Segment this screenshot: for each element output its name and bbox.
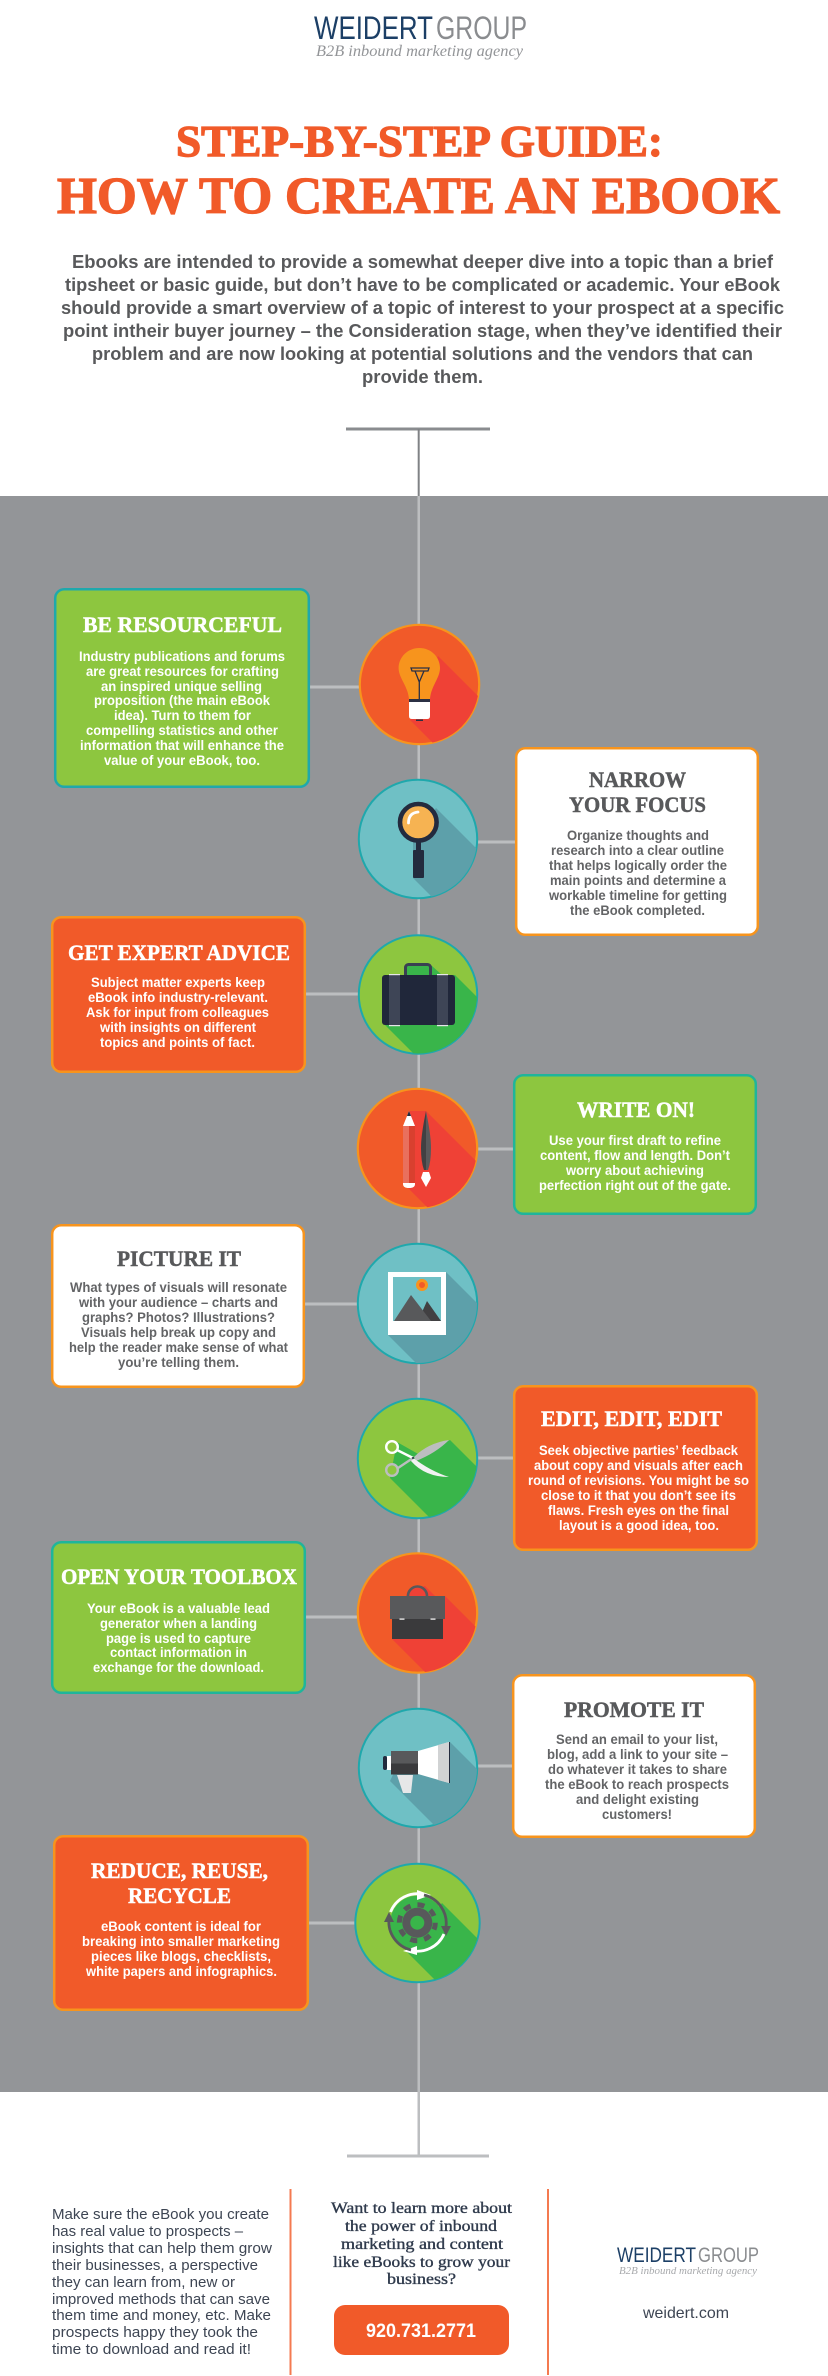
body text: be resourceful: are great resources for crafting [86,664,279,679]
body text: write on: content, flow and length. Don’t [540,1148,730,1163]
footer: logo: B2B inbound marketing agency [619,2265,757,2277]
body text: edit edit edit: about copy and visuals after each [534,1458,743,1473]
body text: picture it: with your audience – charts and [78,1295,278,1310]
heading: be resourceful: BE RESOURCEFUL [83,612,282,637]
body text: reduce reuse recycle: pieces like blogs, checklists, [91,1949,271,1964]
footer: left paragraph: them time and money, etc. Make [52,2307,271,2324]
body text: edit edit edit [528,1443,749,1533]
panel: narrow your focus [516,748,758,935]
footer: left paragraph: Make sure the eBook you create [52,2206,269,2223]
body text: be resourceful: value of your eBook, too. [104,753,260,768]
body text: narrow your focus [548,828,727,918]
body text: open your toolbox: exchange for the download. [93,1660,264,1675]
icon: recycle gear [354,1862,481,1984]
body text: be resourceful: Industry publications and forums [79,649,285,664]
footer: left paragraph: their businesses, a perspective [52,2257,258,2274]
footer: left paragraph: improved methods that can save [52,2291,270,2308]
body text: edit edit edit: Seek objective parties’ feedback [539,1443,738,1458]
body text: narrow your focus: main points and determine a [550,873,726,888]
intro paragraph: Ebooks are intended to provide a somewhat deeper dive into a topic than a brief [72,251,774,272]
body text: promote it: the eBook to reach prospects [545,1777,729,1792]
footer: logo: WEIDERT [617,2244,696,2267]
body text: be resourceful: compelling statistics and other [86,723,279,738]
panel: open your toolbox [52,1542,305,1693]
intro paragraph: tipsheet or basic guide, but don’t have to be complicated or academic. Your eBook [65,274,781,295]
body text: edit edit edit: close to it that you don’t see its [541,1488,736,1503]
body text: be resourceful: proposition (the main eBook [94,693,270,708]
title: HOW TO CREATE AN EBOOK [57,168,781,225]
heading: promote it: PROMOTE IT [564,1697,704,1722]
footer: call to action text: the power of inbound [345,2218,497,2235]
body text: picture it: What types of visuals will resonate [70,1280,287,1295]
footer: logo [617,2244,759,2277]
body text: narrow your focus: that helps logically order the [549,858,727,873]
panel: be resourceful [55,589,309,787]
body text: reduce reuse recycle: eBook content is ideal for [101,1919,262,1934]
header logo [314,10,527,60]
body text: open your toolbox: contact information in [110,1645,247,1660]
body text: edit edit edit: layout is a good idea, too. [559,1518,719,1533]
body text: reduce reuse recycle [82,1919,280,1979]
heading: get expert advice: GET EXPERT ADVICE [68,940,290,965]
footer: left paragraph: has real value to prospects – [52,2223,244,2240]
body text: promote it: do whatever it takes to share [548,1762,727,1777]
body text: promote it: Send an email to your list, [556,1732,718,1747]
body text: picture it: Visuals help break up copy and [81,1325,276,1340]
body text: open your toolbox: page is used to capture [106,1631,251,1646]
timeline spine, end bars and connectors [305,428,516,2158]
intro paragraph: point intheir buyer journey – the Consideration stage, when they’ve identified their [63,320,782,341]
icon: magnifying glass [358,778,478,900]
body text: write on: Use your first draft to refine [549,1133,721,1148]
body text: be resourceful: idea). Turn to them for [114,708,252,723]
heading: reduce reuse recycle [91,1858,268,1908]
body text: write on: perfection right out of the gate. [539,1178,731,1193]
body text: get expert advice: Subject matter experts keep [91,975,265,990]
intro paragraph [61,251,784,387]
body text: narrow your focus: workable timeline for getting [548,888,727,903]
grey timeline panel [0,496,828,2092]
body text: be resourceful [79,649,285,768]
body text: narrow your focus: Organize thoughts and [567,828,709,843]
icon: light bulb [358,624,480,746]
icon: suitcase [358,934,478,1055]
body text: narrow your focus: the eBook completed. [570,903,705,918]
heading: narrow your focus: YOUR FOCUS [569,792,706,817]
body text: promote it [545,1732,729,1822]
body text: open your toolbox: Your eBook is a valuable lead [87,1601,270,1616]
panel: promote it [513,1675,755,1837]
footer: left paragraph: they can learn from, new or [52,2274,235,2291]
panel: get expert advice [52,917,305,1072]
icon: scissors [356,1398,478,1520]
footer: left paragraph [52,2206,272,2358]
body text: picture it: graphs? Photos? Illustrations? [82,1310,275,1325]
body text: picture it: you’re telling them. [118,1355,239,1370]
footer: call to action text: Want to learn more about [331,2200,513,2217]
heading: reduce reuse recycle: REDUCE, REUSE, [91,1858,268,1883]
heading: narrow your focus [569,767,706,817]
heading: open your toolbox: OPEN YOUR TOOLBOX [61,1564,297,1589]
body text: write on: worry about achieving [565,1163,704,1178]
header logo: GROUP [436,10,527,46]
footer: call to action text [331,2200,513,2288]
footer: call to action text: business? [387,2271,456,2288]
body text: edit edit edit: round of revisions. You might be so [528,1473,749,1488]
footer: phone button: 920.731.2771 [366,2321,476,2342]
intro paragraph: provide them. [362,366,483,387]
body text: be resourceful: information that will enhance the [80,738,284,753]
footer: left paragraph: insights that can help them grow [52,2240,272,2257]
body text: get expert advice: Ask for input from colleagues [86,1005,269,1020]
footer: left paragraph: time to download and read it! [52,2341,251,2358]
panel: reduce reuse recycle [54,1836,308,2010]
panel: edit edit edit [514,1386,757,1550]
body text: get expert advice: with insights on different [99,1020,256,1035]
footer: call to action text: like eBooks to grow your [333,2254,511,2271]
body text: reduce reuse recycle: white papers and infographics. [85,1964,277,1979]
body text: get expert advice: topics and points of fact. [100,1035,255,1050]
panel: write on [514,1075,756,1214]
footer: phone button [334,2305,509,2355]
header logo: WEIDERT [314,10,433,46]
body text: be resourceful: an inspired unique selling [101,679,262,694]
icon: pencil and pen [356,1088,478,1210]
body text: picture it: help the reader make sense of what [69,1340,288,1355]
icon: picture [356,1242,478,1364]
heading: write on: WRITE ON! [577,1097,695,1122]
body text: get expert advice [86,975,269,1050]
body text: promote it: blog, add a link to your site – [547,1747,728,1762]
body text: narrow your focus: research into a clear outline [551,843,724,858]
footer: logo: GROUP [698,2244,759,2267]
heading: picture it: PICTURE IT [117,1246,241,1271]
intro paragraph: should provide a smart overview of a topic of interest to your prospect at a specific [61,297,784,318]
footer: left paragraph: prospects happy they took the [52,2324,258,2341]
title [57,117,781,225]
body text: write on [539,1133,731,1193]
header logo: B2B inbound marketing agency [316,43,524,60]
body text: promote it: customers! [602,1807,672,1822]
intro paragraph: problem and are now looking at potential solutions and the vendors that can [92,343,753,364]
title: STEP-BY-STEP GUIDE: [176,117,663,166]
heading: edit edit edit: EDIT, EDIT, EDIT [541,1406,722,1431]
icon: toolbox briefcase [356,1552,478,1674]
footer: dividers [290,2189,549,2375]
icon: megaphone [358,1708,478,1828]
body text: edit edit edit: flaws. Fresh eyes on the final [548,1503,729,1518]
body text: promote it: and delight existing [576,1792,699,1807]
footer: website: weidert.com [642,2305,729,2322]
heading: reduce reuse recycle: RECYCLE [128,1883,231,1908]
body text: open your toolbox [87,1601,270,1675]
body text: open your toolbox: generator when a landing [100,1616,257,1631]
body text: picture it [69,1280,288,1370]
panel: picture it [52,1225,304,1387]
footer: call to action text: marketing and content [341,2236,504,2253]
body text: reduce reuse recycle: breaking into smaller marketing [82,1934,280,1949]
heading: narrow your focus: NARROW [589,767,686,792]
body text: get expert advice: eBook info industry-relevant. [88,990,268,1005]
